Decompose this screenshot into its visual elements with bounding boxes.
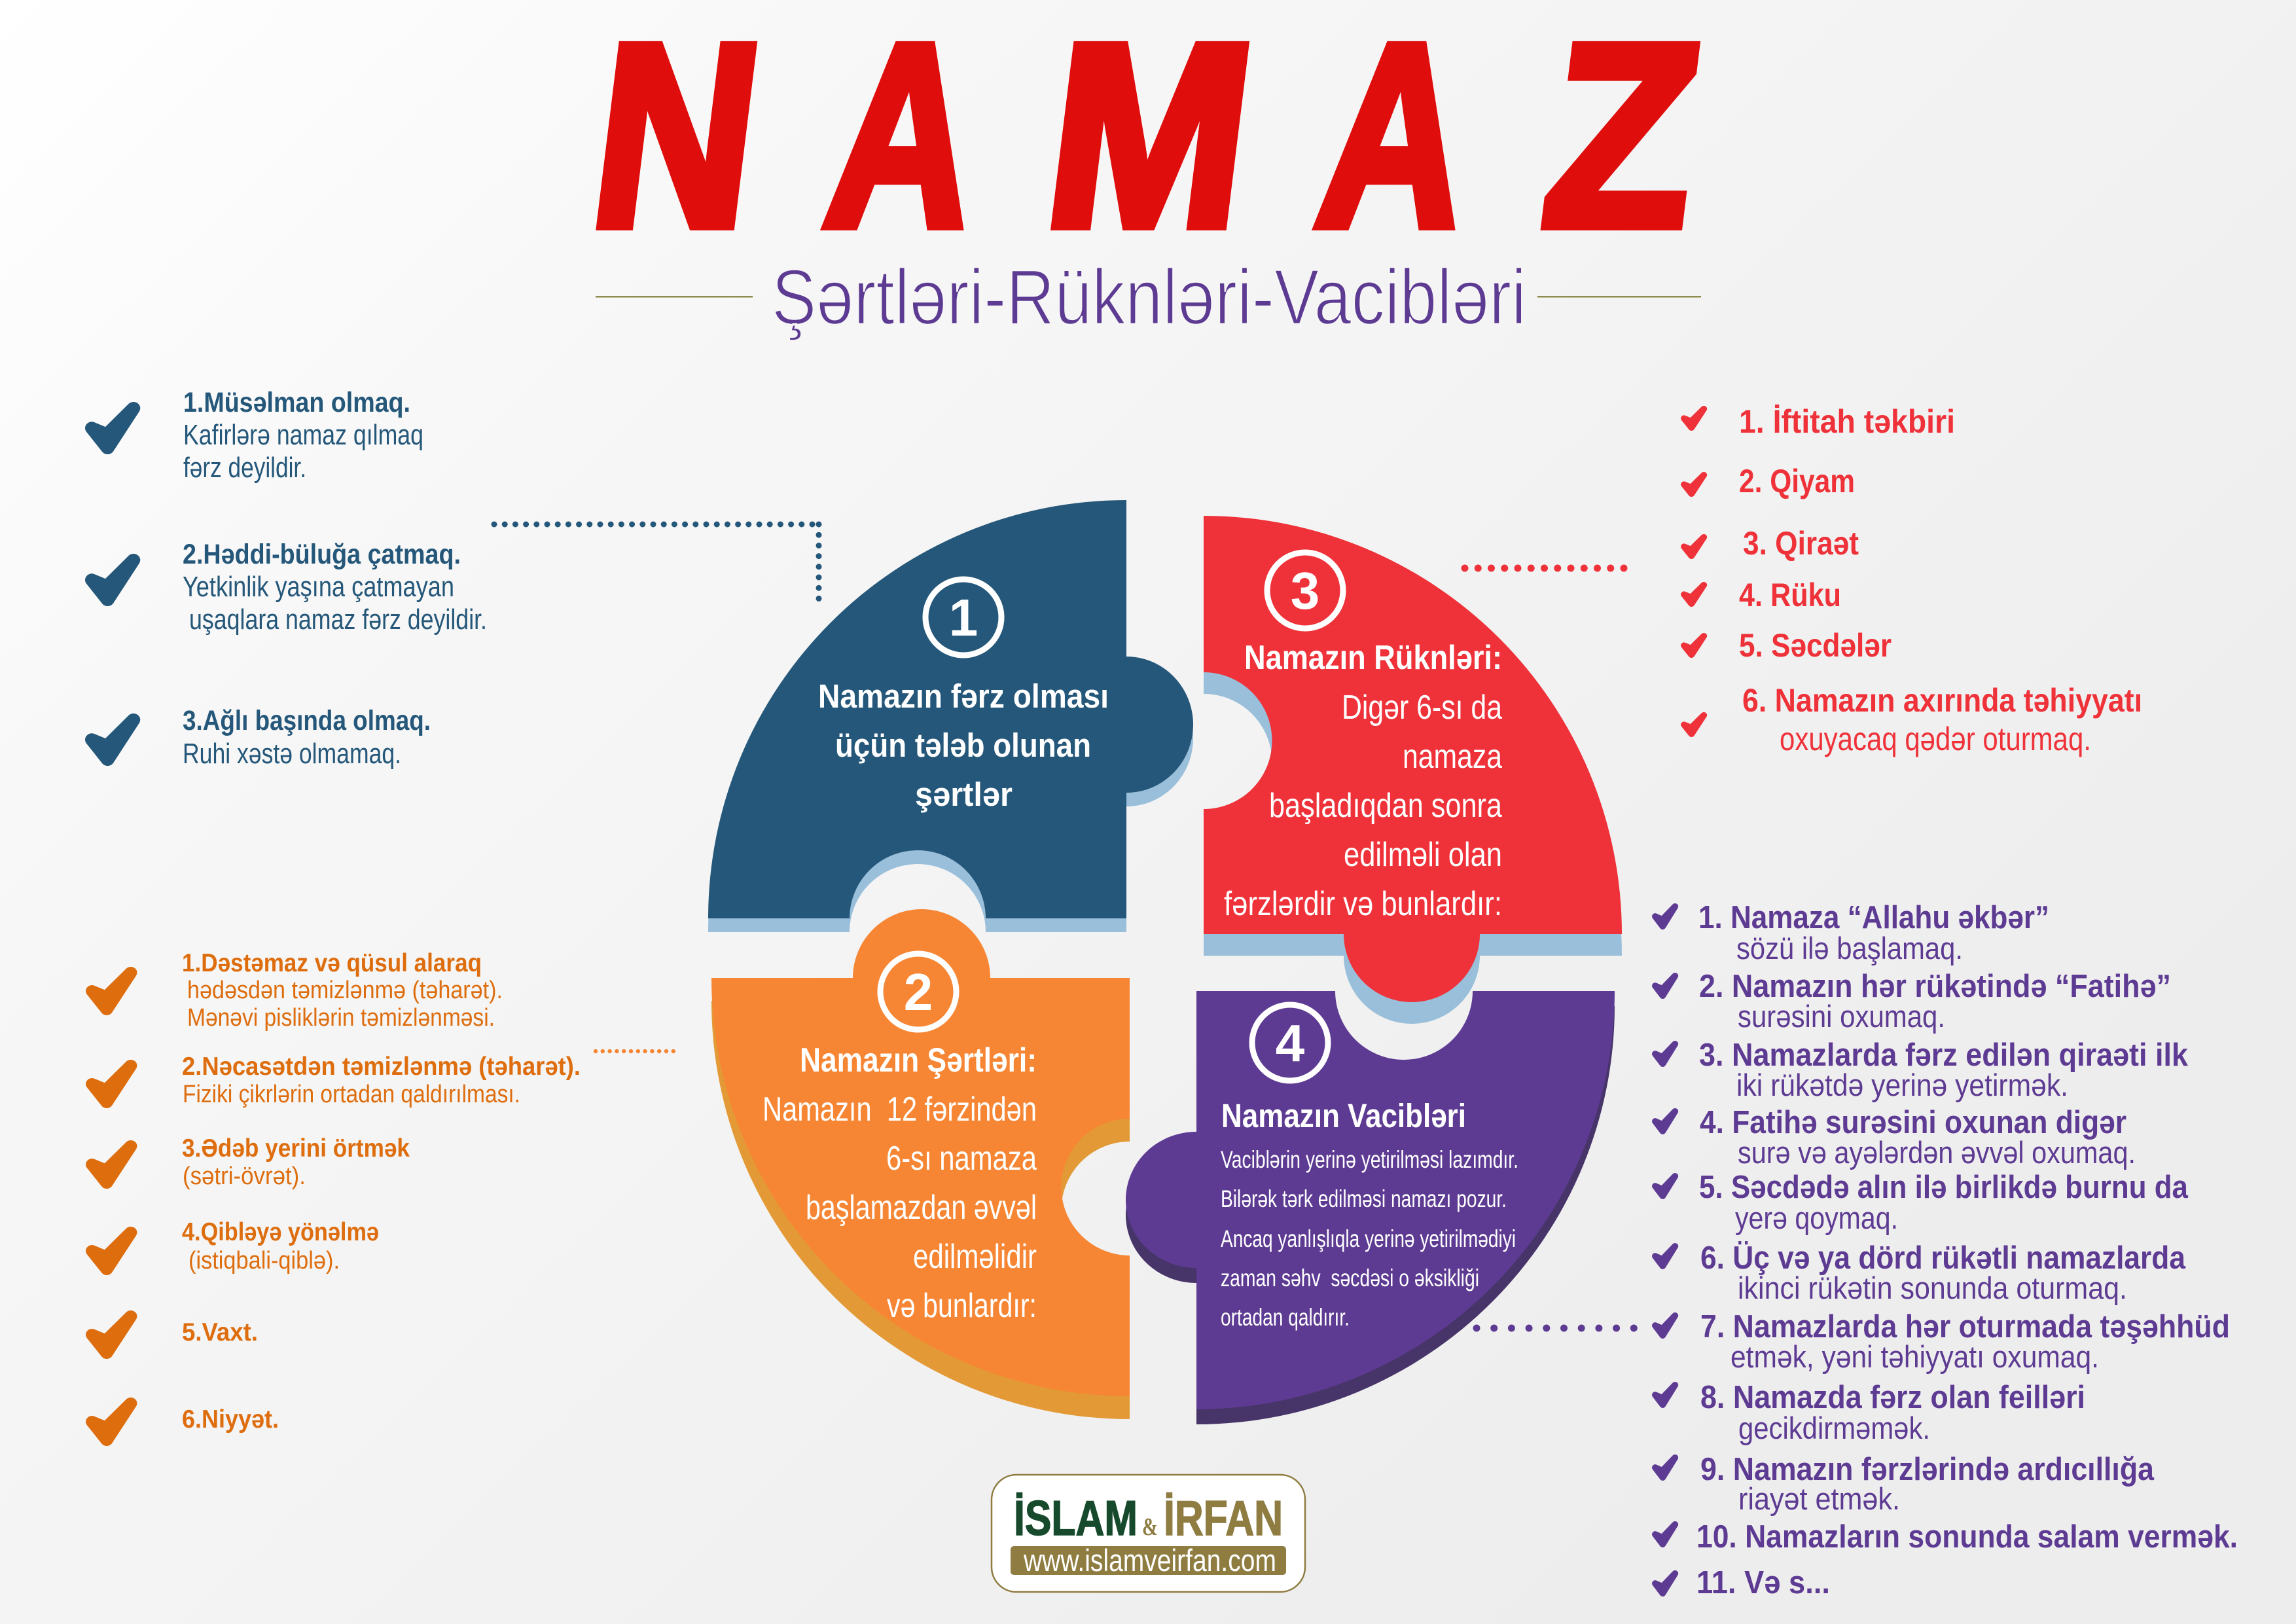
list item 4: 4. Fatihə surəsini oxunan digər: [1700, 1105, 2126, 1140]
number badge 2: [880, 954, 956, 1030]
number badge 3: 3: [1291, 562, 1319, 620]
logo: İRFAN: [1164, 1490, 1283, 1545]
title: [579, 0, 1713, 281]
list item 3: [1655, 1038, 2189, 1102]
connector: red dotted line: [1465, 564, 1626, 572]
text block: purple piece: Bilərək tərk edilməsi namazı pozur.: [1221, 1185, 1507, 1212]
number badge 1: [925, 579, 1001, 655]
text block: purple piece: ortadan qaldırır.: [1221, 1304, 1350, 1331]
list item 10: 10. Namazların sonunda salam vermək.: [1696, 1519, 2238, 1555]
list item 1: Mənəvi pisliklərin təmizlənməsi.: [187, 1004, 495, 1032]
text block: orange piece: edilməlidir: [913, 1238, 1037, 1276]
logo: &: [1142, 1513, 1158, 1541]
list item 2: 2.Həddi-büluğa çatmaq.: [183, 539, 461, 570]
panel: puzzle piece 2 orange: [711, 909, 1130, 1419]
list item 3: [92, 705, 431, 770]
list item 8: 8. Namazda fərz olan feilləri: [1700, 1380, 2085, 1415]
list item 1: 1. İftitah təkbiri: [1739, 403, 1955, 440]
logo: www.islamveirfan.com: [1023, 1543, 1276, 1578]
list item 5: [1655, 1170, 2189, 1235]
list item 9: riayət etmək.: [1738, 1481, 1900, 1516]
list item 1: sözü ilə başlamaq.: [1736, 931, 1963, 965]
list item 7: 7. Namazlarda hər oturmada təşəhhüd: [1700, 1309, 2230, 1344]
text block: red piece: Namazın Rüknləri:: [1244, 639, 1502, 677]
list item 1: 1.Müsəlman olmaq.: [183, 387, 410, 418]
text block: blue piece: [818, 677, 1109, 813]
connector: blue dotted line: [494, 524, 819, 603]
text block: purple piece: zaman səhv səcdəsi o əksikliği: [1221, 1265, 1479, 1291]
text block: red piece: namaza: [1403, 738, 1502, 776]
list item 6: 6. Üç və ya dörd rükətli namazlarda: [1700, 1240, 2186, 1276]
list item 2: [92, 539, 487, 636]
text block: orange piece: başlamazdan əvvəl: [806, 1189, 1037, 1227]
list item 7: [1655, 1309, 2230, 1374]
list item 3: Ruhi xəstə olmamaq.: [183, 738, 401, 770]
list item 1: Kafirlərə namaz qılmaq: [183, 419, 423, 451]
list item 11: 11. Və s...: [1696, 1565, 1830, 1600]
list item 1: [1655, 900, 2049, 965]
panel: puzzle piece 4 purple: [1126, 991, 1615, 1424]
list item 4: [1684, 577, 1841, 613]
text block: blue piece: üçün tələb olunan: [835, 727, 1091, 764]
panel: puzzle piece 1 blue: [708, 500, 1193, 932]
number badge 3: [1267, 552, 1343, 628]
list item 6: ikinci rükətin sonunda oturmaq.: [1738, 1271, 2127, 1305]
list item 1: 1.Dəstəmaz və qüsul alaraq: [182, 949, 482, 977]
list item 3: iki rükətdə yerinə yetirmək.: [1736, 1068, 2068, 1102]
logo: [992, 1475, 1305, 1592]
list item 2: 2. Namazın hər rükətində “Fatihə”: [1699, 969, 2171, 1004]
panel: puzzle piece 3 red: [1204, 516, 1622, 1024]
list item 5: yerə qoymaq.: [1735, 1200, 1898, 1235]
list item 3: 3. Namazlarda fərz edilən qiraəti ilk: [1699, 1038, 2189, 1073]
list item 2: 2.Nəcasətdən təmizlənmə (təharət).: [182, 1053, 581, 1081]
text block: purple piece: Namazın Vacibləri: [1221, 1097, 1466, 1134]
panel: rukns list top right: [1684, 403, 2142, 757]
logo: İSLAM: [1014, 1490, 1138, 1545]
list item 3: [92, 1134, 410, 1190]
list item 4: 4. Rüku: [1739, 577, 1841, 613]
list item 4: [1655, 1105, 2136, 1170]
text block: red piece: fərzlərdir və bunlardır:: [1224, 885, 1502, 923]
list item 5: 5. Səcdədə alın ilə birlikdə burnu da: [1699, 1170, 2189, 1205]
list item 5: 5.Vaxt.: [182, 1318, 258, 1346]
number badge 2: 2: [904, 963, 933, 1021]
subtitle: Şərtləri-Rüknləri-Vacibləri: [772, 253, 1526, 341]
list item 6: [1655, 1240, 2186, 1305]
list item 5: [1684, 627, 1892, 664]
text block: red piece: Digər 6-sı da: [1342, 689, 1502, 727]
text block: purple piece: Vaciblərin yerinə yetirilməsi lazımdır.: [1221, 1146, 1518, 1173]
panel: wajibs list bottom right: [1655, 900, 2238, 1600]
text block: orange piece: Namazın Şərtləri:: [800, 1041, 1037, 1079]
list item 4: surə və ayələrdən əvvəl oxumaq.: [1738, 1135, 2136, 1170]
list item 2: surəsini oxumaq.: [1738, 999, 1945, 1034]
list item 4: (istiqbali-qiblə).: [188, 1247, 340, 1274]
text block: orange piece: 6-sı namaza: [886, 1140, 1037, 1178]
list item 1: [92, 387, 423, 484]
text block: red piece: edilməli olan: [1344, 836, 1502, 874]
panel: conditions list top left: [92, 387, 487, 770]
number badge 4: 4: [1276, 1014, 1305, 1072]
list item 6: 6. Namazın axırında təhiyyatı: [1742, 682, 2142, 719]
list item 2: 2. Qiyam: [1739, 463, 1855, 499]
list item 1: 1. Namaza “Allahu əkbər”: [1698, 900, 2049, 935]
list item 1: hədəsdən təmizlənmə (təharət).: [187, 977, 503, 1004]
text block: red piece: başladıqdan sonra: [1269, 787, 1502, 825]
list item 3: 3.Ədəb yerini örtmək: [182, 1134, 410, 1163]
list item 6: [92, 1403, 279, 1440]
list item 6: oxuyacaq qədər oturmaq.: [1780, 721, 2091, 757]
list item 4: [92, 1218, 379, 1274]
text block: orange piece: və bunlardır:: [887, 1287, 1037, 1325]
list item 6: [1684, 682, 2142, 757]
list item 1: fərz deyildir.: [183, 452, 306, 484]
text block: blue piece: Namazın fərz olması: [818, 677, 1109, 715]
text block: purple piece: [1221, 1097, 1518, 1331]
text block: blue piece: şərtlər: [915, 776, 1013, 813]
list item 4: 4.Qibləyə yönəlmə: [182, 1218, 379, 1246]
list item 7: etmək, yəni təhiyyatı oxumaq.: [1731, 1339, 2099, 1374]
list item 8: gecikdirməmək.: [1738, 1411, 1930, 1445]
list item 2: uşaqlara namaz fərz deyildir.: [189, 604, 487, 636]
list item 9: [1655, 1452, 2155, 1516]
list item 3: (sətri-övrət).: [183, 1163, 306, 1190]
list item 2: Yetkinlik yaşına çatmayan: [183, 571, 454, 603]
list item 8: [1655, 1380, 2085, 1445]
list item 9: 9. Namazın fərzlərində ardıcıllığa: [1700, 1452, 2155, 1487]
list item 2: [1655, 969, 2171, 1034]
connector: purple dotted line: [1477, 1325, 1635, 1331]
list item 5: 5. Səcdələr: [1739, 627, 1892, 664]
number badge 4: [1252, 1005, 1328, 1081]
list item 2: Fiziki çikrlərin ortadan qaldırılması.: [183, 1081, 520, 1108]
text block: orange piece: [762, 1041, 1037, 1325]
text block: red piece: [1224, 639, 1502, 923]
text block: purple piece: Ancaq yanlışlıqla yerinə yetirilmədiyi: [1221, 1225, 1516, 1252]
list item 5: [92, 1316, 258, 1353]
list item 1: [92, 949, 503, 1032]
list item 2: [1684, 463, 1855, 499]
panel: prerequisites list bottom left: [92, 949, 581, 1440]
text block: orange piece: Namazın 12 fərzindən: [762, 1091, 1037, 1128]
connector: orange dotted line: [596, 1049, 673, 1053]
number badge 1: 1: [949, 588, 978, 647]
list item 2: [92, 1053, 581, 1108]
list item 3: 3.Ağlı başında olmaq.: [183, 705, 431, 736]
list item 3: 3. Qiraət: [1743, 525, 1859, 562]
list item 3: [1684, 525, 1859, 562]
list item 6: 6.Niyyət.: [182, 1405, 279, 1434]
